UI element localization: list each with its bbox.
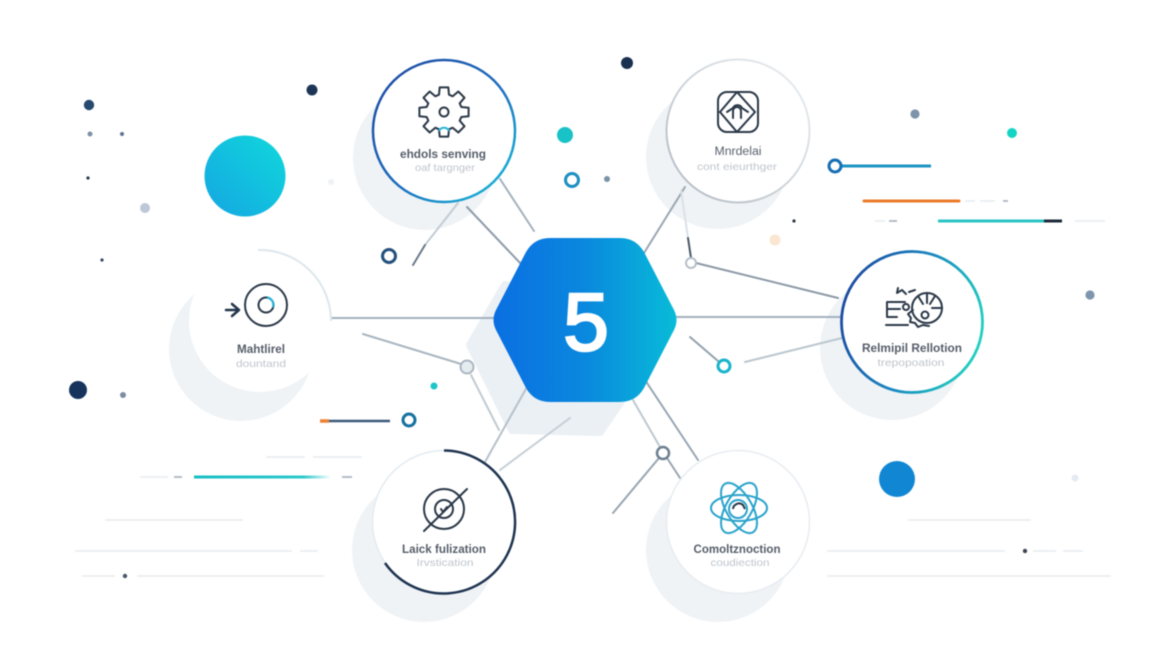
icon: target ring with arrow <box>226 284 287 326</box>
sublabel: top left: oaf targnger <box>415 162 476 174</box>
sublabel: right: trepopoation <box>878 357 945 369</box>
icon: crossed target <box>424 489 467 531</box>
orange bar <box>864 200 959 202</box>
label: bottom right: Comoltznoction <box>694 544 780 556</box>
connector lines <box>332 179 842 513</box>
faint tick marks <box>174 200 1008 478</box>
accent ring markers <box>382 174 578 262</box>
label: right: Relmipil Rellotion <box>862 343 962 355</box>
decorative dots <box>69 57 1095 578</box>
slider: orange and navy with ring <box>320 414 415 426</box>
sublabel: left: dountand <box>236 358 286 370</box>
label: top right: Mnrdelai <box>714 146 762 158</box>
background decorative faint lines <box>75 201 1111 576</box>
connector nodes <box>460 258 730 459</box>
large cyan circle <box>204 136 286 216</box>
central number: 5 <box>563 277 609 368</box>
sublabel: bottom right: coudiection <box>710 557 770 569</box>
large blue circle <box>879 461 915 497</box>
node: top right <box>666 60 810 202</box>
sublabel: bottom left: Irvstication <box>416 557 474 569</box>
central hexagon <box>494 238 676 402</box>
icon: gear with document lines <box>886 288 942 327</box>
icon: diamond in rounded square <box>718 92 758 132</box>
label: bottom left: Laick fulization <box>402 544 486 556</box>
node shadows <box>169 85 964 622</box>
node: bottom left <box>372 450 516 594</box>
icon: atom <box>711 477 767 539</box>
node: right <box>842 252 982 392</box>
label: top left: ehdols senving <box>400 149 486 161</box>
teal and dark bar <box>938 220 1062 222</box>
node: top left <box>373 60 515 202</box>
slider: blue line with ring <box>829 160 931 172</box>
node: left <box>189 250 331 392</box>
node: bottom right <box>666 450 810 594</box>
teal gradient bar <box>194 476 331 478</box>
icon: gear <box>419 87 469 137</box>
label: left: Mahtlirel <box>237 344 285 356</box>
hexagon shadow <box>470 285 622 432</box>
sublabel: top right: cont eieurthger <box>697 161 778 173</box>
